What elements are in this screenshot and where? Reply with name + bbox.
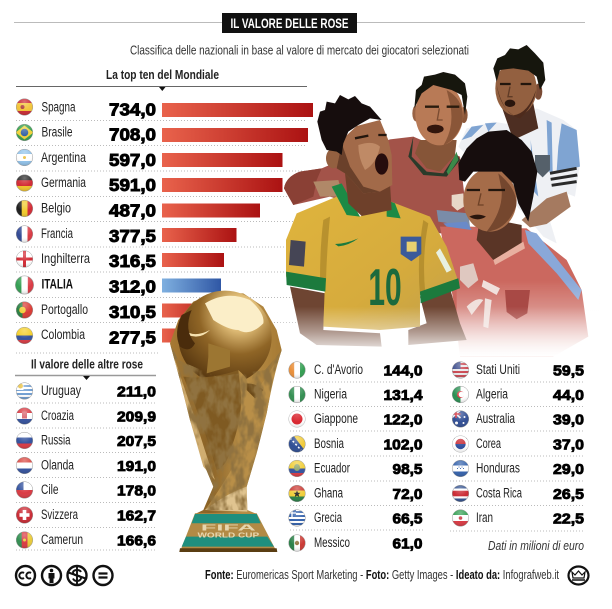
row: Cile: 178,0 xyxy=(117,482,156,500)
row: Bosnia xyxy=(288,435,422,454)
row: Inghilterra: Inghilterra xyxy=(41,251,90,266)
row: Algeria: 44,0 xyxy=(553,387,584,404)
row: Uruguay: 211,0 xyxy=(117,384,156,400)
row: Ghana: 72,0 xyxy=(392,486,422,503)
unit note: Dati in milioni di euro xyxy=(488,539,584,553)
row: Belgio: 487,0 xyxy=(109,200,156,220)
World Cup trophy: FIFA xyxy=(201,524,257,533)
row: Cile xyxy=(16,481,156,500)
row: Russia xyxy=(16,432,156,450)
row: Bosnia: Bosnia xyxy=(314,436,344,451)
row: Brasile xyxy=(16,124,156,144)
row: Svizzera: Svizzera xyxy=(41,507,78,522)
row: Iran xyxy=(452,509,584,528)
flag: Ghana xyxy=(288,484,306,502)
title bar: IL VALORE DELLE ROSE xyxy=(230,16,348,31)
row: Nigeria: Nigeria xyxy=(314,386,347,402)
row: ITALIA: 312,0 xyxy=(109,276,156,296)
row: Messico xyxy=(288,534,422,552)
row: Portogallo: Portogallo xyxy=(41,302,88,317)
row: C. d'Avorio: C. d'Avorio xyxy=(314,362,363,377)
row: Germania xyxy=(16,174,156,195)
row: C. d'Avorio: 144,0 xyxy=(384,362,422,380)
heading: top ten: La top ten del Mondiale xyxy=(106,67,219,82)
flag: Australia xyxy=(452,410,470,428)
row: Costa Rica xyxy=(452,484,584,503)
flag: Spain xyxy=(16,98,33,116)
photo bottom fade xyxy=(280,307,607,357)
row: Grecia: Grecia xyxy=(314,510,342,525)
row: Stati Uniti: 59,5 xyxy=(553,362,584,380)
row: Nigeria: 131,4 xyxy=(384,387,423,404)
row: Ecuador: Ecuador xyxy=(314,460,350,476)
flag: Greece xyxy=(288,509,306,527)
row: Grecia: 66,5 xyxy=(392,510,422,528)
row: Svizzera: 162,7 xyxy=(117,508,156,524)
row: Australia xyxy=(452,410,584,428)
row: Iran: Iran xyxy=(476,510,493,525)
icon: attribution xyxy=(42,566,61,585)
row: Costa Rica: Costa Rica xyxy=(476,486,522,500)
row: Iran: 22,5 xyxy=(553,510,584,528)
icon: non-commercial xyxy=(67,566,87,585)
flag: Japan xyxy=(288,410,306,428)
flag: Honduras xyxy=(452,460,470,478)
row: Brasile: 708,0 xyxy=(109,124,156,144)
flag: Croatia xyxy=(16,408,33,424)
row: Giappone: 122,0 xyxy=(384,412,422,428)
row: Nigeria xyxy=(288,386,423,404)
flag: South Korea xyxy=(452,435,470,453)
row: Algeria xyxy=(452,386,584,404)
flag: Costa Rica xyxy=(452,484,470,502)
row: Corea: 37,0 xyxy=(553,436,584,454)
row: Germania: 591,0 xyxy=(109,175,156,195)
flag: Russia xyxy=(16,432,33,449)
row: Ghana: Ghana xyxy=(314,486,343,500)
flag: Belgium xyxy=(16,200,33,217)
icon: infografweb crown xyxy=(568,566,588,584)
row: Argentina: 597,0 xyxy=(109,150,156,170)
row: Croazia: Croazia xyxy=(41,408,74,423)
row: Francia: Francia xyxy=(41,226,73,241)
row: Brasile: Brasile xyxy=(42,124,72,140)
flag: Germany xyxy=(16,174,33,192)
row: Camerun xyxy=(16,531,156,550)
row: Svizzera xyxy=(16,506,156,524)
flag: Portugal xyxy=(16,302,33,318)
icon: no derivatives xyxy=(94,566,112,585)
row: Bosnia: 102,0 xyxy=(384,436,422,454)
row: Russia: Russia xyxy=(41,432,71,448)
bar chart: top ten values xyxy=(162,103,313,342)
row: Giappone: Giappone xyxy=(314,411,358,426)
row: Germania: Germania xyxy=(41,175,86,190)
flag: Switzerland xyxy=(16,506,33,524)
row: Inghilterra xyxy=(16,250,156,271)
row: Argentina xyxy=(16,148,156,170)
flag: Ivory Coast xyxy=(288,362,306,378)
row: Stati Uniti xyxy=(452,361,584,380)
row: Stati Uniti: Stati Uniti xyxy=(476,362,520,377)
player: Brazil number 10 xyxy=(286,95,467,347)
flag: Colombia xyxy=(16,327,33,344)
row: Grecia xyxy=(288,509,422,528)
player: Argentina xyxy=(458,45,580,243)
row: Olanda xyxy=(16,456,156,475)
row: Cile: Cile xyxy=(41,482,58,497)
row: Spagna xyxy=(16,98,156,120)
row: Colombia xyxy=(16,326,156,348)
flag: Algeria xyxy=(452,386,470,404)
flag: Ecuador xyxy=(288,460,306,478)
row: Belgio: Belgio xyxy=(41,200,71,216)
row: Messico: 61,0 xyxy=(392,536,422,552)
row: Colombia: 277,5 xyxy=(109,328,156,348)
row: Honduras: Honduras xyxy=(476,460,520,476)
row: Olanda: 191,0 xyxy=(117,458,156,475)
row: Australia: 39,0 xyxy=(553,412,584,428)
flag: United States xyxy=(452,361,470,379)
World Cup trophy xyxy=(170,291,282,552)
row: Russia: 207,5 xyxy=(117,433,156,450)
flag: France xyxy=(16,226,33,242)
row: Camerun: Camerun xyxy=(41,532,83,547)
row: Argentina: Argentina xyxy=(41,150,86,165)
flag: Brazil xyxy=(16,124,33,141)
flag: England xyxy=(16,250,33,268)
title bar xyxy=(14,13,585,33)
flag: Cameroon xyxy=(16,532,33,548)
flag: Nigeria xyxy=(288,386,306,403)
row: ITALIA xyxy=(15,275,156,296)
row: Australia: Australia xyxy=(476,411,515,426)
row: Ecuador xyxy=(288,460,422,478)
row: Olanda: Olanda xyxy=(41,458,74,472)
other squads dotted separators xyxy=(16,382,585,550)
World Cup trophy: WORLD CUP xyxy=(197,532,260,539)
row: Colombia: Colombia xyxy=(41,327,85,342)
flag: Iran xyxy=(452,509,470,527)
row: Ghana xyxy=(288,484,422,503)
flag: Netherlands xyxy=(16,457,33,474)
flag: Chile xyxy=(16,482,33,498)
row: Corea xyxy=(452,435,584,454)
row: ITALIA: ITALIA xyxy=(42,276,73,292)
row: Croazia: 209,9 xyxy=(117,408,156,426)
heading: top ten xyxy=(16,67,307,91)
heading: other squads: Il valore delle altre rose xyxy=(31,356,143,372)
row: Ecuador: 98,5 xyxy=(392,461,422,478)
row: Honduras xyxy=(452,460,584,478)
row: Camerun: 166,6 xyxy=(117,532,156,550)
flag: Italy xyxy=(15,275,34,295)
row: Uruguay xyxy=(16,382,156,400)
row: Messico: Messico xyxy=(314,535,350,550)
row: Uruguay: Uruguay xyxy=(41,383,81,398)
subtitle: Classifica delle nazionali in base al valore di mercato dei giocatori selezionati xyxy=(130,42,469,58)
row: Algeria: Algeria xyxy=(476,386,508,402)
heading: other squads xyxy=(15,356,156,380)
icon: creative commons licence xyxy=(16,566,112,585)
row: Costa Rica: 26,5 xyxy=(553,486,584,503)
row: Spagna: Spagna xyxy=(42,100,76,114)
row: Corea: Corea xyxy=(476,436,501,451)
photo: four football players xyxy=(280,45,607,357)
row: Honduras: 29,0 xyxy=(553,461,584,478)
row: Giappone xyxy=(288,410,422,428)
player: Spain xyxy=(440,130,600,357)
player: Brazil number 10: 10 xyxy=(368,258,402,316)
row: Portogallo xyxy=(16,301,156,322)
row: Francia xyxy=(16,225,156,246)
top ten dotted separators xyxy=(16,120,307,353)
flag: Uruguay xyxy=(16,382,33,400)
flag: Mexico xyxy=(288,534,306,552)
player: Portugal xyxy=(284,72,470,233)
row: Portogallo: 310,5 xyxy=(109,302,156,322)
row: Francia: 377,5 xyxy=(109,226,156,246)
row: Belgio xyxy=(16,200,156,220)
flag: Bosnia xyxy=(288,435,306,453)
row: Spagna: 734,0 xyxy=(109,100,156,120)
icon: cc xyxy=(16,566,35,585)
footer credits: Fonte: Euromericas Sport Marketing - Foto: Getty Images - Ideato da: Infografweb.it xyxy=(205,568,559,582)
row: Croazia xyxy=(16,407,156,426)
flag: Argentina xyxy=(16,149,33,166)
row: C. d'Avorio xyxy=(288,361,422,380)
row: Inghilterra: 316,5 xyxy=(109,251,156,271)
